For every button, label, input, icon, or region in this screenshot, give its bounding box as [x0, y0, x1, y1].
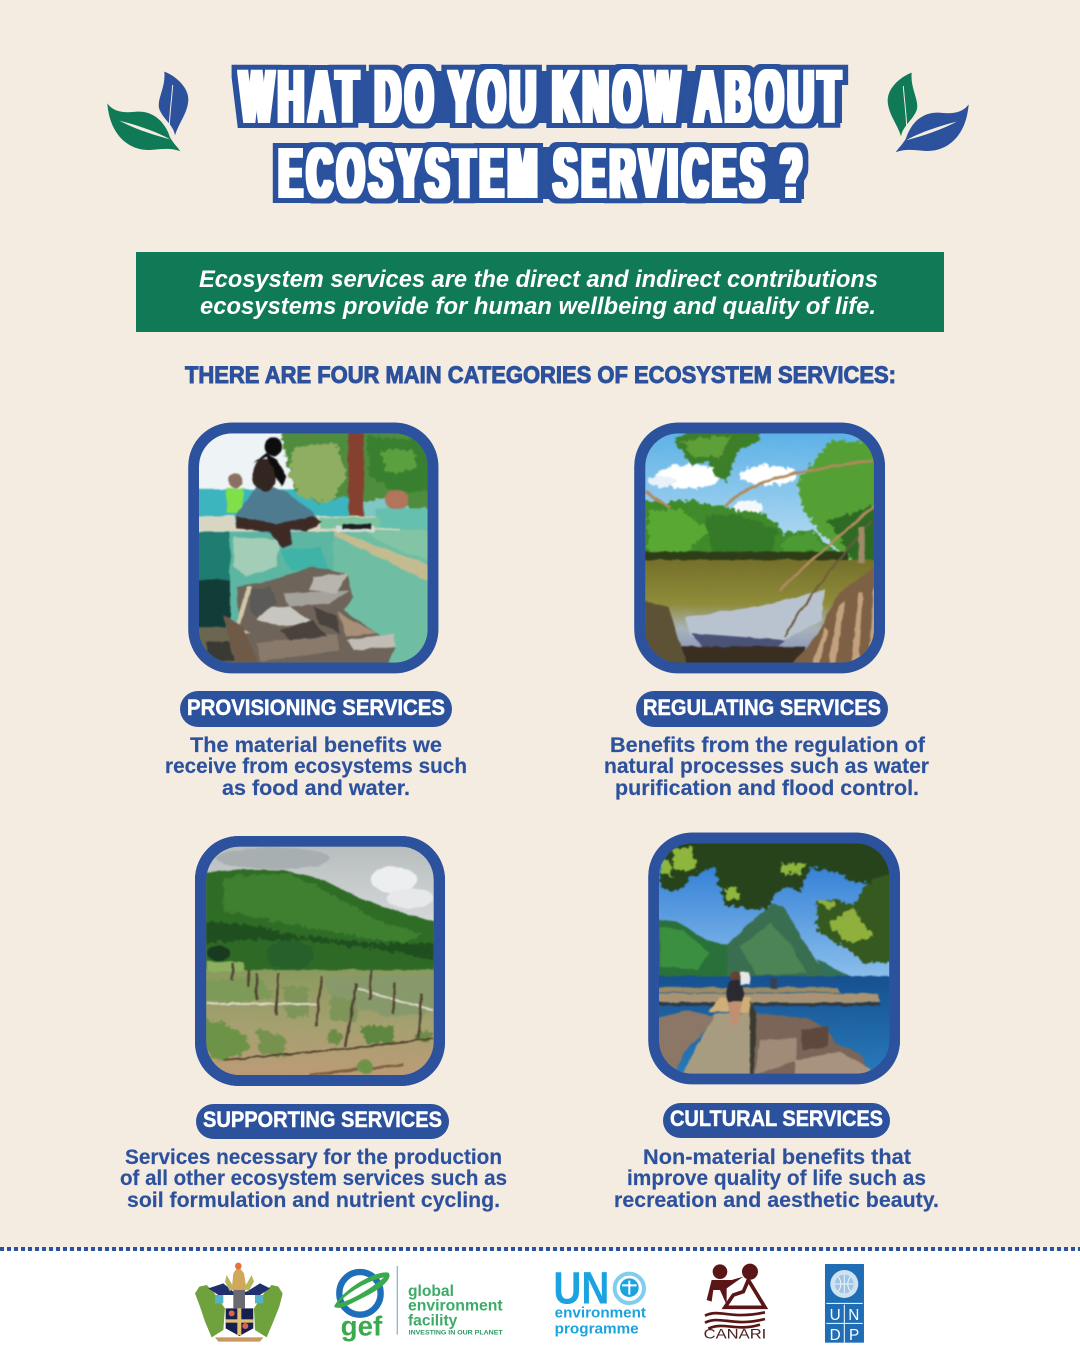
pill label: REGULATING SERVICES — [643, 695, 881, 720]
description — [614, 1145, 939, 1212]
logo: GEF: INVESTING IN OUR PLANET — [409, 1330, 503, 1337]
description: soil formulation and nutrient cycling. — [127, 1188, 500, 1212]
description: The material benefits we — [190, 733, 442, 757]
logo: UN environment programme — [553, 1262, 646, 1338]
photo: hillside farm — [193, 836, 447, 1086]
icon: left leaves — [107, 72, 188, 151]
logo: GEF: gef — [341, 1310, 383, 1341]
section heading: THERE ARE FOUR MAIN CATEGORIES OF ECOSYSTEM SERVICES: — [185, 362, 896, 389]
logo: CANARI — [704, 1264, 766, 1342]
definition banner: ecosystems provide for human wellbeing and quality of life. — [200, 293, 876, 320]
photo: fisherman with catch — [187, 423, 440, 677]
description — [120, 1145, 507, 1212]
definition banner — [136, 252, 944, 332]
icon: right leaves — [888, 73, 969, 152]
logo: GEF: environment — [408, 1298, 503, 1315]
photo: mangrove lagoon — [632, 423, 892, 677]
description: Non-material benefits that — [643, 1145, 911, 1169]
pill label: PROVISIONING SERVICES — [187, 695, 445, 720]
logo: UNDP: N — [848, 1307, 859, 1324]
logo: UNDP: P — [849, 1327, 859, 1344]
description — [165, 733, 467, 800]
logo: UNDP — [825, 1264, 864, 1344]
pill label — [196, 1104, 449, 1139]
logo: UNDP: D — [830, 1327, 841, 1344]
description: Benefits from the regulation of — [610, 733, 926, 757]
description: of all other ecosystem services such as — [120, 1166, 507, 1190]
description: improve quality of life such as — [627, 1166, 926, 1190]
photo: Piton and pier — [647, 833, 900, 1086]
pill label: SUPPORTING SERVICES — [203, 1107, 442, 1132]
pill label: CULTURAL SERVICES — [670, 1106, 883, 1131]
logo: UN environment programme: UN — [553, 1262, 609, 1313]
title — [238, 55, 845, 212]
pill label — [636, 691, 888, 727]
panel: footer logos — [0, 1249, 1080, 1350]
description: purification and flood control. — [615, 776, 919, 800]
panel: regulating services — [604, 423, 930, 800]
logo: GEF: facility — [408, 1312, 458, 1329]
description: natural processes such as water — [604, 754, 930, 778]
panel: provisioning services — [165, 423, 467, 800]
logo: GEF: global — [408, 1283, 454, 1300]
definition banner: Ecosystem services are the direct and indirect contributions — [199, 266, 878, 293]
pill label — [663, 1103, 890, 1138]
description: recreation and aesthetic beauty. — [614, 1188, 939, 1212]
pill label — [180, 691, 452, 727]
logo: CANARI: CANARI — [704, 1326, 766, 1342]
description — [604, 733, 930, 800]
logo: UN environment programme: programme — [555, 1322, 639, 1338]
panel: supporting services — [120, 836, 507, 1212]
logo: UN environment programme: environment — [555, 1306, 646, 1322]
description: Services necessary for the production — [125, 1145, 502, 1169]
panel: cultural services — [614, 833, 939, 1212]
description: as food and water. — [222, 776, 410, 800]
logo: GEF — [334, 1266, 503, 1341]
logo: Saint Lucia coat of arms — [195, 1263, 283, 1342]
description: receive from ecosystems such — [165, 754, 467, 778]
logo: UNDP: U — [830, 1307, 841, 1324]
